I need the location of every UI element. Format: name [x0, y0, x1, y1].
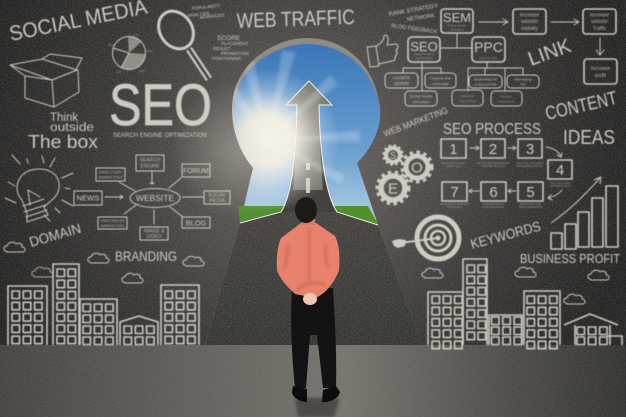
- step 4: [548, 160, 572, 188]
- step 5: 5: [526, 184, 535, 201]
- step arrows: [469, 146, 562, 200]
- step 7: 7: [450, 184, 459, 201]
- node: video marketing: MARKETING: [101, 223, 124, 228]
- small text: score: PROMOTION: [221, 51, 249, 56]
- box: SEM: [441, 9, 473, 33]
- small text: score: PLACEMENT: [221, 41, 249, 46]
- asphalt texture: [206, 212, 422, 345]
- shirt shading: [283, 228, 329, 290]
- caption: search engine optimization: SEARCH ENGINE OPTIMIZATION: [113, 132, 207, 139]
- node: search engine: SEARCH: [140, 158, 161, 164]
- small text: rank strategy: RANK STRATEGY: [388, 3, 439, 18]
- node: forum: [182, 164, 210, 177]
- small box: education improvement: improvement: [459, 99, 476, 103]
- step 1: RESEARCH AND: [442, 161, 466, 165]
- step 3: IMPLEMENTATION: [517, 164, 543, 168]
- small box: regular adjustments: adjustments: [498, 100, 515, 104]
- icon: target with arrow: [392, 217, 459, 259]
- upper arrow road tint: [286, 81, 332, 190]
- box: increase profit: [584, 59, 617, 84]
- step 7: TRACKING: [447, 205, 463, 209]
- small box: education improvement: [452, 90, 483, 106]
- step 6: LINK BUILDING: [483, 205, 505, 209]
- node: forum: FORUM: [183, 168, 209, 175]
- keyhole opening with sky and road: [196, 38, 430, 350]
- step 3: 3: [526, 141, 534, 158]
- sun glow: [232, 72, 336, 209]
- text: branding: BRANDING: [115, 248, 177, 264]
- node: search engine: [136, 155, 164, 171]
- box: increase website visibility: Increase: [520, 12, 539, 18]
- building 4: [120, 316, 158, 345]
- floor: [0, 345, 626, 417]
- gear S: S: [390, 150, 396, 160]
- node: blog: [182, 217, 210, 228]
- small text: rank strategy: [388, 3, 439, 35]
- box: SEM: SEM: [443, 10, 471, 25]
- heading: web traffic: WEB TRAFFIC: [236, 6, 355, 33]
- grass: [238, 206, 378, 224]
- shoes: [292, 386, 340, 402]
- step 2: [476, 139, 510, 168]
- step 1: ANALYSIS: [446, 164, 461, 168]
- icon: thumbs up: [367, 35, 398, 67]
- text: web marketing: WEB MARKETING: [382, 105, 449, 139]
- small box: managing list: Managing: [514, 76, 532, 82]
- shirt: [277, 223, 340, 298]
- node: search engine: ENGINE: [140, 164, 160, 170]
- website node: WEBSITE: [136, 193, 174, 203]
- small box: searching list: a special list: [475, 82, 497, 86]
- step 4: 4: [556, 162, 564, 179]
- keyhole rim: [205, 38, 422, 345]
- icon: SEO gears: [377, 146, 432, 204]
- small box: organic link campaign: campaign: [432, 81, 449, 86]
- box: increase website traffic: Traffic: [593, 26, 607, 32]
- pie chart: 30%: [147, 49, 153, 53]
- small box: managing list: list: [521, 82, 526, 86]
- node: directory marketing: MARKETING: [99, 174, 122, 180]
- building 1: [428, 292, 463, 349]
- small box: regular adjustments: Regular: [501, 94, 512, 98]
- pie chart: 17%: [133, 33, 139, 37]
- box: increase website visibility: visibility: [521, 26, 539, 32]
- text: domain: DOMAIN: [27, 220, 83, 250]
- small text: rank strategy: NETWORK: [406, 13, 435, 23]
- chart: rising bars: [551, 177, 618, 249]
- text: keywords: KEYWORDS: [469, 218, 542, 252]
- trend arrow: [551, 177, 601, 223]
- road edge lines: [240, 81, 378, 225]
- step 6: 6: [489, 184, 498, 201]
- step 4: OPTIMIZATION: [549, 184, 571, 188]
- node: video marketing: VIDEO/BLOG: [100, 218, 125, 223]
- mind map: website: [74, 155, 230, 240]
- pie chart: 8%: [117, 70, 121, 74]
- node: image and video: [140, 227, 168, 240]
- process steps: [440, 139, 572, 209]
- heading: SEO process: SEO PROCESS: [443, 121, 541, 138]
- city skyline: right: [428, 259, 622, 349]
- connector arrows: [105, 172, 204, 224]
- small text: score: POSITIONING: [212, 56, 242, 61]
- box: increase profit: Increase: [591, 66, 610, 72]
- step 7: [440, 182, 470, 209]
- step 3: [516, 139, 544, 168]
- sun rays: [230, 50, 360, 184]
- neck: [302, 219, 315, 225]
- icon: lightbulb: [5, 155, 73, 222]
- small box: managing list: [507, 75, 539, 88]
- small box: content update: content: [393, 76, 410, 82]
- small box: organic link campaign: [425, 73, 456, 88]
- small box: searching list: Searching for: [474, 76, 498, 82]
- gear E: E: [388, 180, 398, 198]
- small text: popularity analysis: ANALYSIS: [188, 11, 210, 18]
- light spill on wall: [170, 80, 310, 220]
- box: SEO: Search Engine: [414, 52, 434, 56]
- box: increase profit: profit: [595, 73, 607, 79]
- road centre dashes: [306, 163, 310, 193]
- step 4: OFF-SITE SEO: [550, 181, 571, 185]
- small box: education improvement: Education: [461, 94, 475, 98]
- building 4: [524, 291, 560, 349]
- text: think outside the box: [28, 112, 99, 152]
- node: social media: SOCIAL: [208, 192, 226, 198]
- step 5: MONITOR SITE: [520, 202, 541, 206]
- man seen from behind: [277, 197, 340, 417]
- box: increase website traffic: Increase: [590, 12, 609, 18]
- box: increase website visibility: website: [521, 19, 538, 25]
- step 6: [481, 182, 506, 209]
- head hair: [295, 197, 317, 223]
- small box: social media campaign: Social media: [410, 94, 433, 98]
- building 2: [463, 259, 487, 345]
- box: PPC: [472, 37, 505, 62]
- node: social media: [204, 191, 230, 204]
- city skyline: left: [8, 264, 199, 345]
- text: think outside the box: Think: [50, 112, 78, 124]
- icon: magnifying glass: [151, 4, 209, 79]
- building 5: [161, 285, 199, 345]
- small box: organic link campaign: Organic link: [430, 76, 451, 80]
- step 6: MARKETING &: [483, 202, 504, 206]
- node: directory marketing: DIRECTORY: [99, 170, 123, 174]
- building 3: [80, 299, 117, 345]
- box: increase website traffic: [583, 9, 616, 34]
- node: social media: MEDIA: [209, 198, 226, 204]
- node: image and video: IMAGE &: [144, 228, 165, 234]
- clouds: right: [422, 267, 609, 304]
- small box: content update: update: [394, 81, 409, 87]
- node: blog: BLOG: [186, 218, 207, 228]
- gear O: O: [411, 160, 423, 176]
- text: ideas: IDEAS: [563, 127, 615, 149]
- node: video marketing: [98, 217, 127, 229]
- heading: SEO: SEO: [109, 73, 212, 138]
- small box: content update: [385, 73, 418, 88]
- building 2: [53, 264, 79, 345]
- small text: score: SCORE: [217, 35, 241, 42]
- small boxes tree: [403, 62, 523, 91]
- step 2: 2: [489, 141, 497, 158]
- small box: regular adjustments: [491, 91, 522, 106]
- small text: popularity analysis: [188, 3, 225, 20]
- node: image and video: VIDEO: [146, 234, 162, 240]
- box: SEO: SEO: [410, 39, 438, 54]
- text: link: LINK: [525, 35, 575, 71]
- sky: [234, 44, 380, 225]
- step 2: OPPORTUNITIES: [481, 164, 505, 168]
- floor reflection: [295, 398, 340, 417]
- small text: score: [212, 35, 249, 61]
- pie chart: 25%: [139, 69, 145, 73]
- step 5: [518, 182, 543, 209]
- small box: searching list: [469, 75, 502, 88]
- clasped hands: [303, 293, 317, 305]
- icon: open box: [10, 54, 82, 107]
- step 2: KEYWORD RESEARCH: [476, 161, 510, 165]
- node: directory marketing: [96, 168, 125, 181]
- small text: rank strategy: BLOG FEEDBACK: [391, 23, 438, 35]
- node: news: [74, 191, 102, 205]
- small box: social media campaign: [405, 91, 437, 106]
- step 7: MANAGING BUDGET: [440, 202, 470, 206]
- small text: popularity analysis: POPULARITY: [192, 3, 220, 11]
- box: SEM: Search Engine: [447, 24, 467, 28]
- box: increase website visibility: [513, 9, 546, 34]
- step 1: [441, 139, 466, 168]
- building 1: [8, 286, 47, 345]
- house: [564, 314, 622, 345]
- text: think outside the box: The box: [28, 131, 99, 152]
- pie chart: [108, 33, 153, 74]
- small box: social media campaign: campaign: [412, 99, 430, 104]
- step 1: 1: [449, 141, 458, 158]
- box: increase website traffic: website: [591, 19, 608, 25]
- small text: popularity analysis: ADVANCED: [200, 12, 225, 20]
- node: news: NEWS: [77, 194, 99, 202]
- text: think outside the box: outside: [50, 122, 94, 134]
- box: SEO: Optimization: [416, 56, 433, 60]
- website node: [130, 188, 180, 208]
- box: SEO: [408, 37, 440, 62]
- small text: score: RESULT: [213, 46, 231, 51]
- trousers: [291, 288, 336, 388]
- step 3: ON-SITE CHANGES: [516, 161, 544, 165]
- road surface: [205, 134, 422, 345]
- step 5: PERFORMANCE: [519, 205, 542, 209]
- box: PPC: PPC: [474, 39, 503, 55]
- clouds: left: [4, 242, 204, 283]
- building 3: [489, 315, 522, 345]
- flow arrows: [440, 19, 604, 55]
- pie chart: 30%: [108, 43, 114, 47]
- flowchart: SEM and PPC: [385, 9, 617, 106]
- box: SEM: Marketing: [450, 28, 464, 32]
- box: PPC: Pay-Per-Click: [479, 56, 498, 60]
